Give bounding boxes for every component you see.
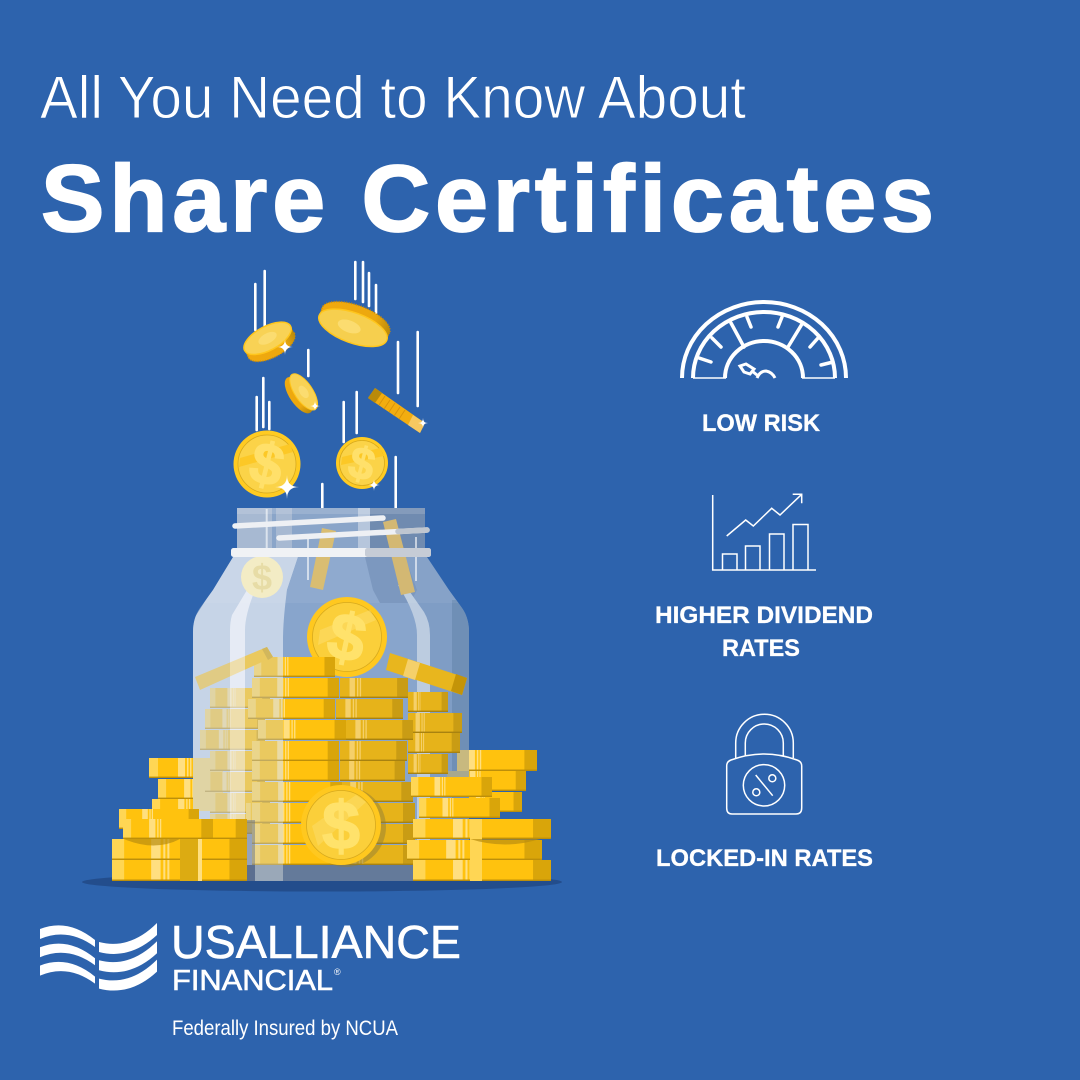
label: higher dividend rates: RATES	[722, 635, 800, 662]
label: locked-in rates: LOCKED-IN RATES	[656, 845, 873, 872]
title: intro line: All You Need to Know About	[40, 64, 746, 131]
front coin stack: right	[407, 777, 551, 881]
falling coin: edge-on	[368, 388, 425, 433]
label: low risk: LOW RISK	[702, 410, 821, 437]
coin behind stack: $	[321, 597, 373, 677]
jar back	[190, 555, 472, 885]
illustration: jar of coins	[82, 262, 562, 892]
coin behind stack	[307, 597, 387, 677]
front coin stack: left	[112, 809, 255, 881]
logo wordmark: USALLIANCE	[171, 916, 461, 968]
jar neck	[237, 508, 425, 552]
sparkles	[275, 339, 428, 499]
falling coin: tilted left	[239, 316, 300, 368]
label: higher dividend rates: HIGHER DIVIDEND	[655, 602, 873, 629]
label: higher dividend rates	[655, 602, 873, 662]
in-jar motion lines	[267, 509, 416, 581]
ground shadow	[82, 872, 562, 892]
logo mark: waves	[40, 923, 157, 991]
in-jar coin stacks	[193, 647, 467, 865]
jar rim bars	[231, 518, 431, 557]
icon: padlock with percent	[727, 714, 802, 814]
falling coin: face small: $	[344, 436, 380, 491]
footer: NCUA note: Federally Insured by NCUA	[172, 1017, 398, 1040]
falling coin: narrow	[279, 369, 323, 418]
logo: USAlliance Financial: FINANCIAL	[172, 965, 333, 997]
jar base band	[247, 865, 413, 881]
falling coin: tilted large	[314, 294, 395, 354]
logo: USAlliance Financial	[40, 916, 461, 997]
logo: USAlliance Financial: ®	[334, 967, 341, 977]
front coin with dollar: $	[322, 788, 360, 864]
back coin stacks outside jar	[149, 750, 537, 812]
icon: low risk gauge	[682, 302, 846, 378]
title: Share Certificates: Share Certificates	[41, 146, 934, 252]
falling coin: face large: $	[243, 429, 290, 500]
falling motion lines	[255, 262, 418, 517]
icon: rising bar chart	[713, 494, 816, 570]
front coin with dollar	[301, 785, 386, 867]
coins falling inside jar: $	[252, 557, 272, 598]
coins falling inside jar	[241, 519, 415, 598]
